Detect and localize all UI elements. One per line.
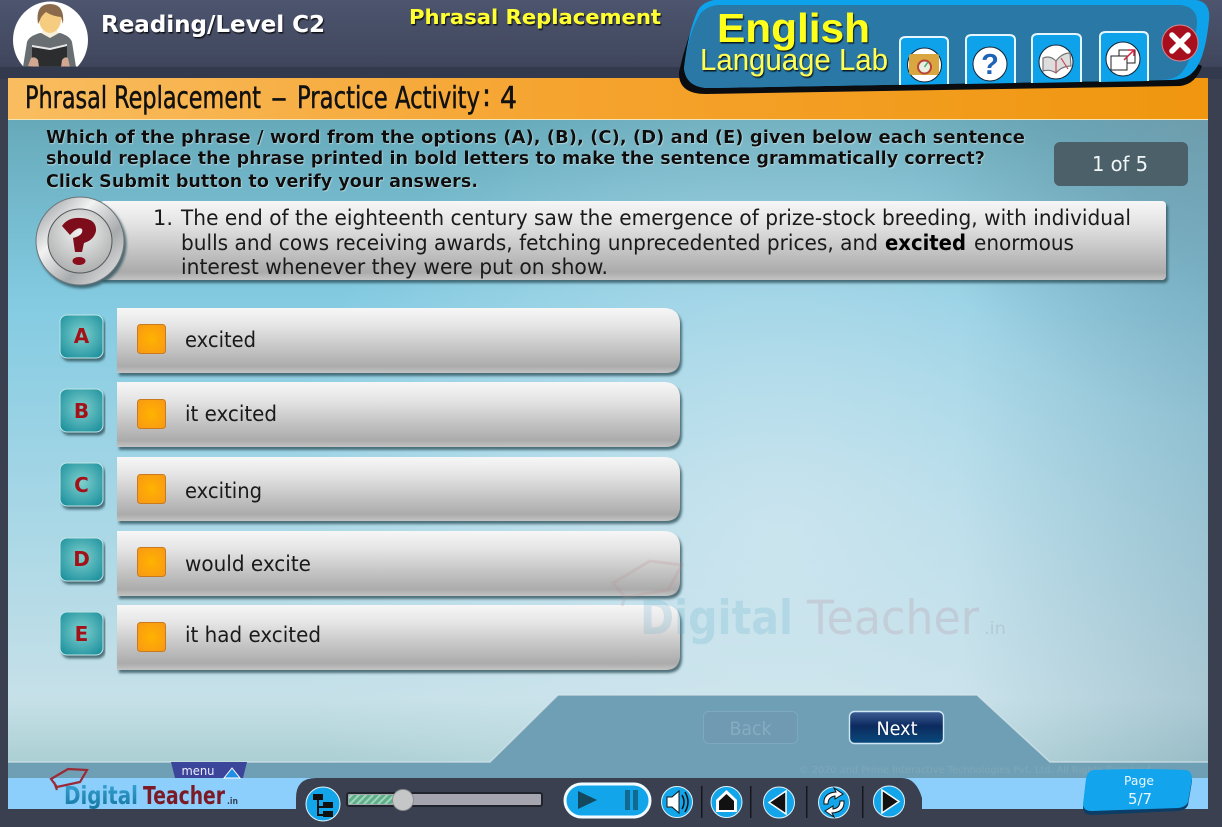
option C card [117,457,680,521]
logo panel [679,0,1209,94]
icon: home [711,786,742,818]
divider [806,786,808,818]
question text [153,206,1131,279]
option B card [117,382,680,447]
option E badge: E [75,622,88,646]
option C badge [60,463,103,506]
option A checkbox [138,324,166,354]
question text: bulls and cows receiving awards, fetching unprecedented prices, and [181,231,878,255]
instructions: should replace the phrase printed in bold letters to make the sentence grammatically correct? [46,148,985,169]
option C badge: C [74,473,89,497]
divider [862,786,864,818]
topic heading: Phrasal Replacement [409,5,661,29]
question text: The end of the eighteenth century saw the emergence of prize-stock breeding, with individual [180,206,1131,230]
option D checkbox [138,548,166,576]
watermark: Digital Teacher: Digital [640,591,793,646]
instructions: Which of the phrase / word from the options (A), (B), (C), (D) and (E) given below each sentence [46,127,1025,148]
menu tab [171,762,247,778]
avatar: student reading [13,2,88,66]
option B badge [60,389,103,432]
divider [750,786,752,818]
page indicator: Page [1124,773,1154,788]
icon: replay [818,787,850,818]
Language Lab wordmark: Language Lab [700,42,888,77]
instructions: Click Submit button to verify your answers. [46,171,478,192]
icon: progress folder [900,37,948,85]
icon: previous [764,787,794,818]
question counter [1054,142,1188,186]
copyright note: © 2020 and Prime Interactive Technologies Pvt. Ltd. All Rights Reserved [799,765,1151,776]
English Language Lab header [679,0,1209,94]
logo: Digital Teacher: Teacher [143,781,225,810]
option E [60,605,680,670]
option A card [117,308,680,373]
option D card [117,531,680,596]
option C text: exciting [185,479,262,503]
icon: help [966,35,1015,84]
option A badge [60,315,103,358]
watermark: Digital Teacher [613,561,1006,646]
option B [60,382,680,447]
icon: question mark medallion [36,197,124,285]
instructions [46,127,1025,192]
option E badge [60,612,103,655]
level heading: Reading/Level C2 [101,12,325,38]
logo: Digital Teacher [51,769,238,810]
activity title: Phrasal Replacement [25,81,261,116]
page indicator [1083,769,1192,815]
icon: next [874,786,904,817]
activity title [25,76,517,116]
option D text: would excite [185,552,311,576]
option E card [117,605,680,670]
English wordmark: English [717,5,870,51]
activity title: : [482,76,491,114]
content background [8,120,1208,778]
option B checkbox [138,400,166,428]
back button [704,712,798,744]
option D badge: D [73,547,90,571]
icon: close button [1162,25,1198,61]
activity title: Practice Activity [297,81,480,116]
header band [0,0,1222,79]
option E text: it had excited [185,623,321,647]
orange activity bar [8,78,1208,120]
icon: sound [662,786,692,818]
question text: enormous [974,231,1074,255]
next button: Next [876,718,918,740]
option D [60,531,680,596]
menu tab: menu [182,764,214,778]
logo wordmark: Digital [64,781,138,810]
icon: contents tree [306,787,340,821]
option A text: excited [185,328,256,352]
option B text: it excited [185,402,277,426]
option E checkbox [138,622,166,652]
question text: interest whenever they were put on show. [181,255,608,279]
question counter: 1 of 5 [1092,152,1148,176]
panel: question [36,197,1166,285]
icon: open book [1032,34,1081,83]
activity title: – [271,81,287,116]
option A badge: A [74,324,90,348]
back button: Back [730,718,772,740]
logo: Digital Teacher: .in [227,797,238,807]
watermark: Digital Teacher: .in [984,619,1006,639]
watermark: Digital Teacher: Teacher [806,591,980,646]
navigation platform [8,695,1208,778]
divider [701,786,702,818]
play and pause control [565,784,650,817]
option C [60,457,680,521]
logo graduation cap [51,769,87,790]
icon: external window [1100,32,1148,82]
option C checkbox [138,474,166,504]
icon: help: ? [981,49,999,81]
option D badge [60,538,103,581]
next button [850,712,944,744]
page indicator: 5/7 [1128,790,1152,808]
option B badge: B [74,399,89,423]
question text: 1. [153,206,173,230]
media control bar [296,778,922,827]
progress slider [347,790,542,810]
question text: excited [885,231,966,255]
activity title: 4 [500,81,517,116]
option A [60,308,680,373]
bottom light strip [8,778,1208,809]
question background [100,201,1166,280]
